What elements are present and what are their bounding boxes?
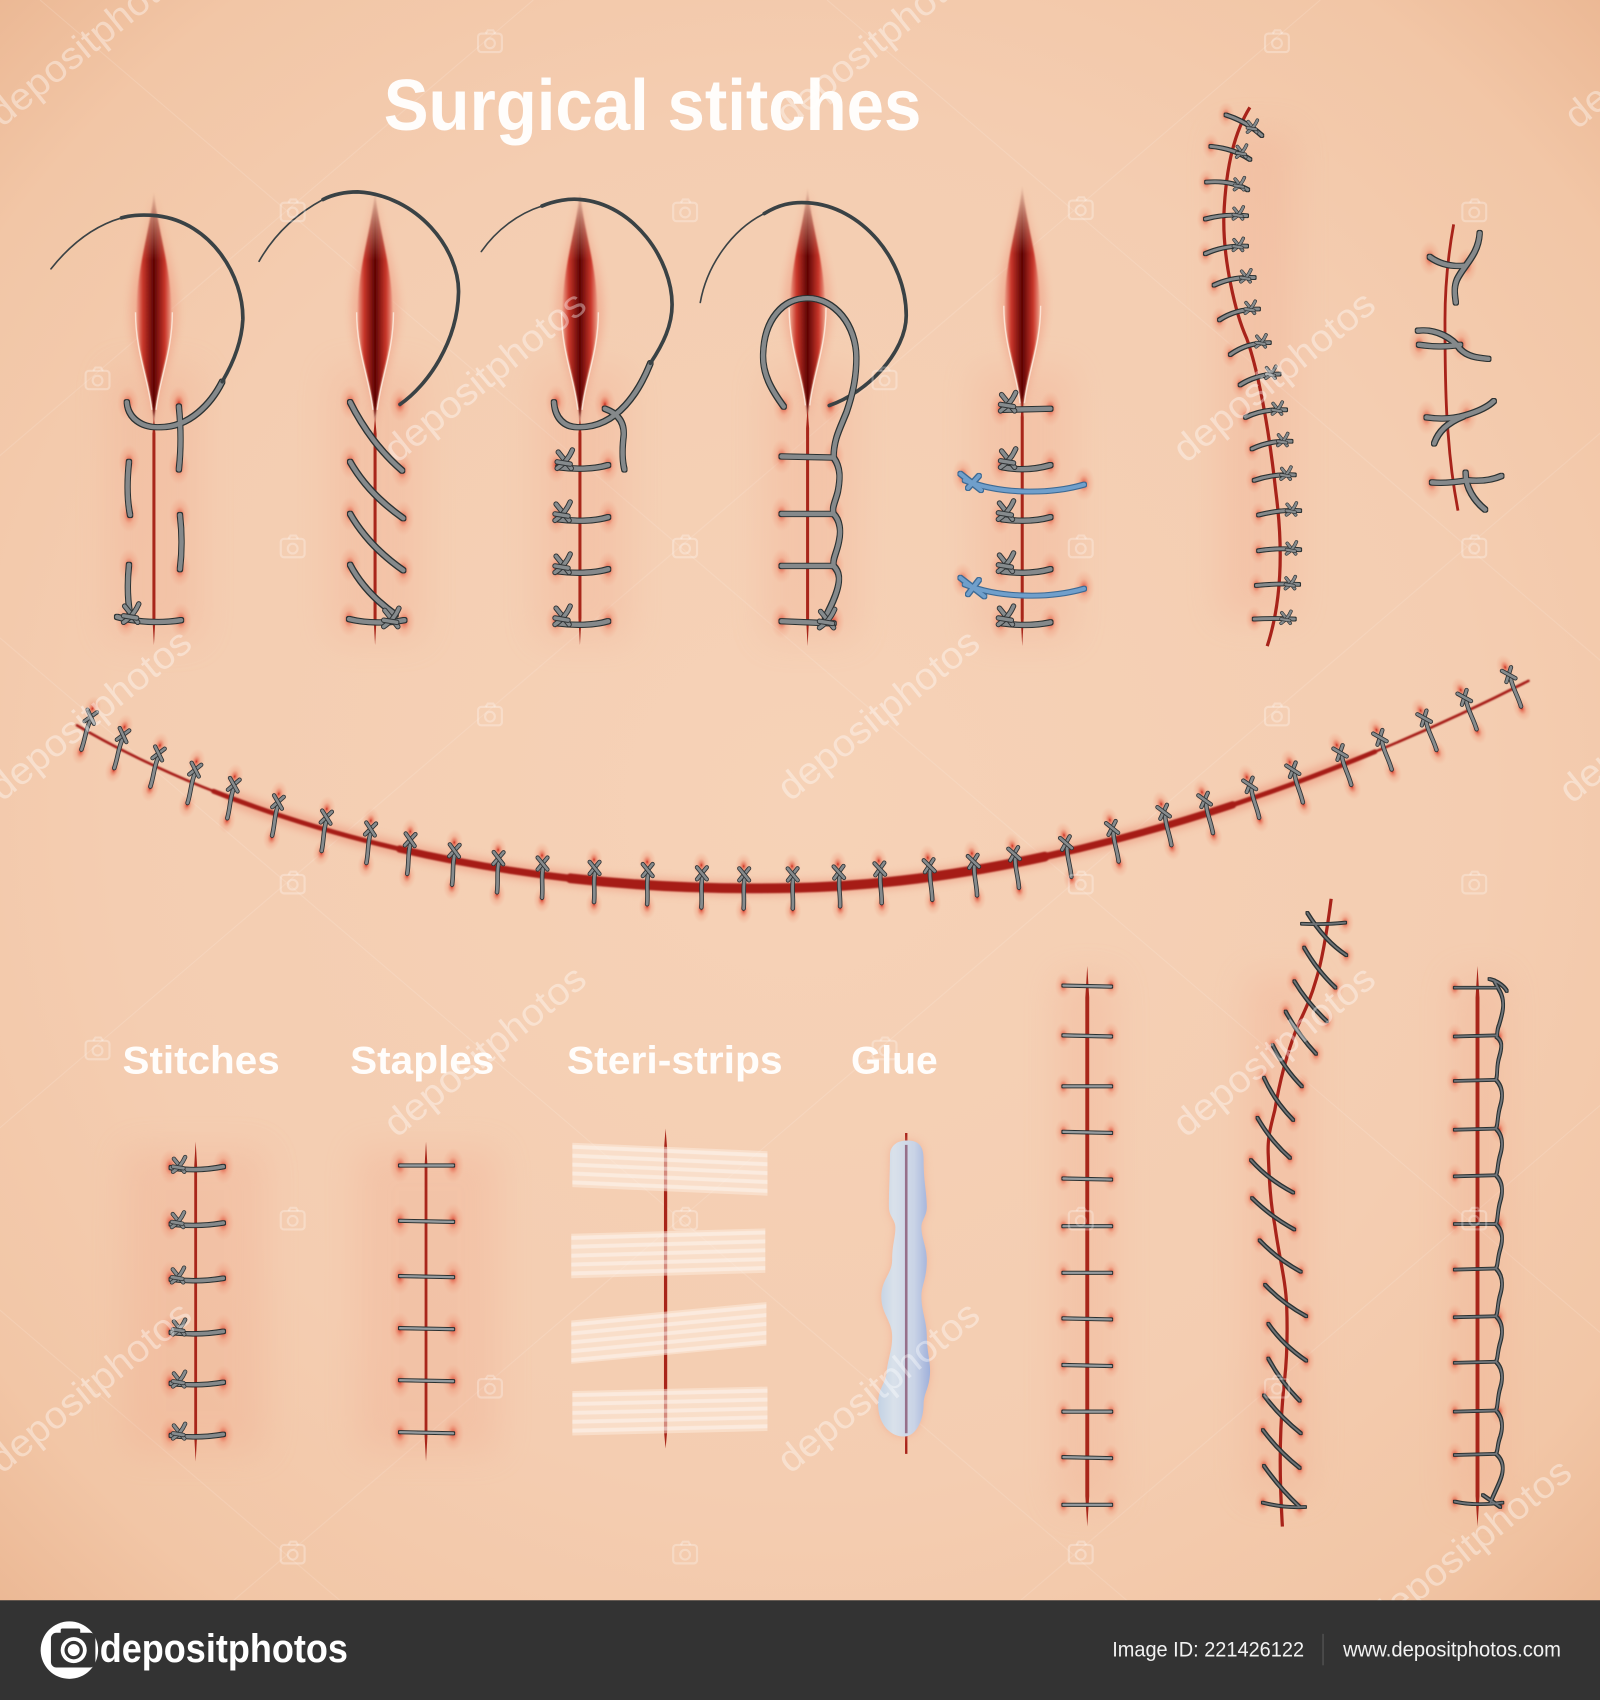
suture step 4: running stitch with looped thread bbox=[700, 186, 906, 646]
website: www.depositphotos.com bbox=[1342, 1639, 1561, 1662]
label: Staples: Staples bbox=[350, 1039, 494, 1082]
long wavy interrupted suture bbox=[1197, 102, 1300, 646]
blue retention sutures bbox=[960, 474, 1084, 596]
curved slanted suture bbox=[1242, 899, 1355, 1527]
curved wound bbox=[77, 681, 1528, 888]
suture step 3: knotted interrupted sutures with needle bbox=[481, 191, 672, 645]
watermarks: depositphotos bbox=[1361, 1450, 1580, 1639]
strip 3 bbox=[571, 1302, 766, 1364]
knotted stitches bbox=[69, 652, 1535, 924]
watermarks: depositphotos bbox=[769, 1293, 988, 1481]
thread segments bbox=[117, 382, 222, 622]
title: Surgical stitches bbox=[384, 65, 921, 146]
suture step 1: needle and interrupted thread bbox=[51, 191, 243, 645]
panel: staples closure bbox=[389, 1142, 464, 1461]
footer bar bbox=[0, 1600, 1600, 1700]
long curved interrupted suture bbox=[69, 652, 1535, 924]
watermarks: depositphotos bbox=[769, 621, 988, 809]
image id: Image ID: 221426122 bbox=[1112, 1639, 1304, 1662]
icon: camera logo bbox=[41, 1621, 98, 1679]
short suture with long ends bbox=[1408, 224, 1501, 511]
logo wordmark: depositphotos bbox=[100, 1627, 348, 1671]
watermarks: depositphotos bbox=[376, 283, 594, 471]
soft redness washes bbox=[108, 130, 1507, 1507]
watermarks: depositphotos bbox=[1165, 957, 1384, 1145]
staples with running suture bbox=[1446, 966, 1510, 1527]
panel: steri-strips closure bbox=[571, 1129, 767, 1448]
label: Glue: Glue bbox=[851, 1039, 938, 1082]
suture step 5: knots with blue retention sutures bbox=[952, 184, 1095, 646]
watermarks: depositphotos bbox=[376, 957, 594, 1145]
watermarks: depositphotos bbox=[1165, 283, 1384, 471]
strip 2 bbox=[571, 1228, 765, 1278]
panel: stitches closure bbox=[159, 1142, 234, 1461]
strip 1 bbox=[572, 1143, 767, 1196]
curved needle bbox=[51, 215, 243, 382]
suture step 2: continuous slanted thread bbox=[259, 191, 459, 645]
label: Stitches: Stitches bbox=[122, 1039, 280, 1082]
strip 4 bbox=[572, 1387, 767, 1435]
label: Steri-strips: Steri-strips bbox=[567, 1039, 783, 1082]
panel: glue closure bbox=[878, 1133, 930, 1454]
long straight staples bbox=[1055, 966, 1120, 1527]
wound bbox=[130, 191, 178, 428]
